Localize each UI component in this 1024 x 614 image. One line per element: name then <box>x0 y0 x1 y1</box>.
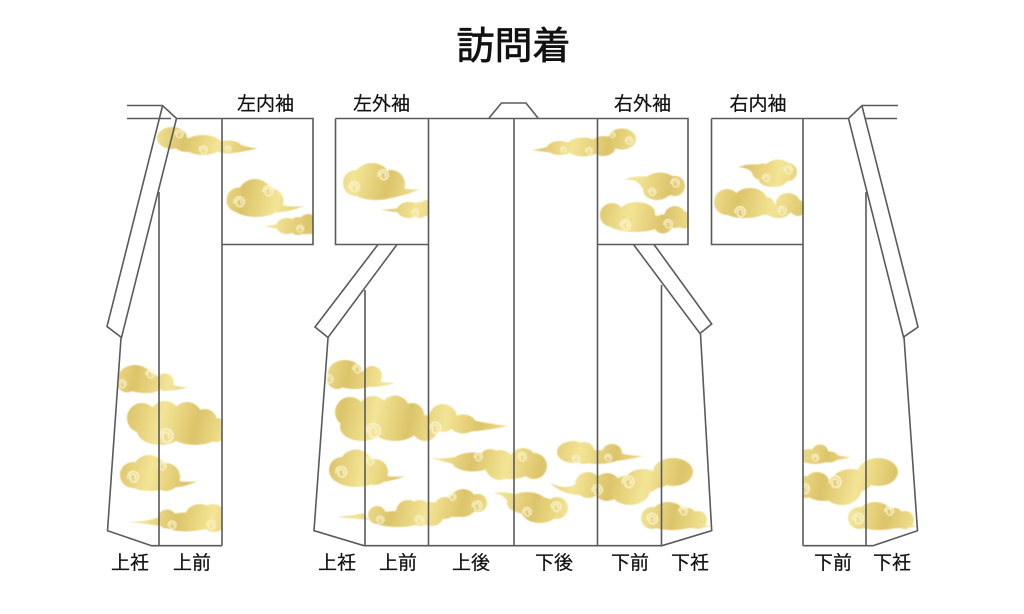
cloud: right body middle <box>550 458 693 505</box>
cloud: right front lower <box>848 502 918 530</box>
panel: gold clouds on right front <box>795 444 918 530</box>
panel: gold clouds on left front <box>118 365 228 532</box>
cloud: right inner sleeve lower <box>714 188 806 218</box>
cloud: left front first <box>118 365 188 393</box>
labels: sleeves <box>237 93 787 115</box>
title: 訪問着 <box>456 26 571 68</box>
label: right outer sleeve: 右外袖 <box>614 93 671 115</box>
label: left inner sleeve: 左内袖 <box>237 93 294 115</box>
cloud: left front second <box>127 401 228 445</box>
cloud: right front upper <box>800 444 851 464</box>
cloud: left inner sleeve lower <box>263 214 317 235</box>
cloud: back shoulder <box>532 128 636 156</box>
diagram: left kimono panel outline <box>107 106 313 546</box>
label: right inner sleeve: 右内袖 <box>729 93 787 115</box>
label: lower front centre: 下前 <box>611 552 649 574</box>
panel: gold clouds on centre body <box>325 360 711 530</box>
cloud: right front middle <box>795 458 898 505</box>
cloud: right outer sleeve upper <box>625 172 685 200</box>
labels: bottom panels <box>111 552 911 574</box>
diagram: centre kimono panel outline <box>314 103 712 546</box>
label: upper front left: 上前 <box>173 552 211 574</box>
cloud: right body lower <box>641 502 711 530</box>
cloud: centre first <box>325 360 395 389</box>
label: left outer sleeve: 左外袖 <box>353 93 410 115</box>
label: upper gusset left: 上衽 <box>111 552 149 574</box>
diagram: right kimono panel outline <box>712 106 918 546</box>
cloud: left shoulder <box>157 127 258 155</box>
label: lower back: 下後 <box>535 552 573 574</box>
cloud: left front third <box>120 455 198 491</box>
cloud: right outer sleeve lower <box>600 202 692 234</box>
cloud: left inner sleeve upper <box>226 179 304 217</box>
label: lower gusset right: 下衽 <box>873 552 911 574</box>
cloud: centre back middle <box>431 448 547 480</box>
label: upper gusset centre: 上衽 <box>318 552 356 574</box>
cloud: right inner sleeve upper <box>738 160 797 187</box>
label: lower gusset centre: 下衽 <box>671 552 709 574</box>
cloud: left front fourth <box>128 504 225 532</box>
cloud: right body upper <box>557 441 643 464</box>
cloud: centre fourth <box>337 489 487 527</box>
cloud: centre back lower <box>493 492 568 523</box>
label: upper back: 上後 <box>452 552 490 574</box>
label: upper front centre: 上前 <box>379 552 417 574</box>
cloud: left outer sleeve upper <box>343 163 420 200</box>
cloud: centre large across seam <box>335 396 508 441</box>
cloud: left outer sleeve lower <box>380 200 435 218</box>
label: lower front right: 下前 <box>814 552 852 574</box>
cloud: centre third <box>329 450 405 487</box>
panel: gold clouds on sleeves <box>157 127 806 235</box>
